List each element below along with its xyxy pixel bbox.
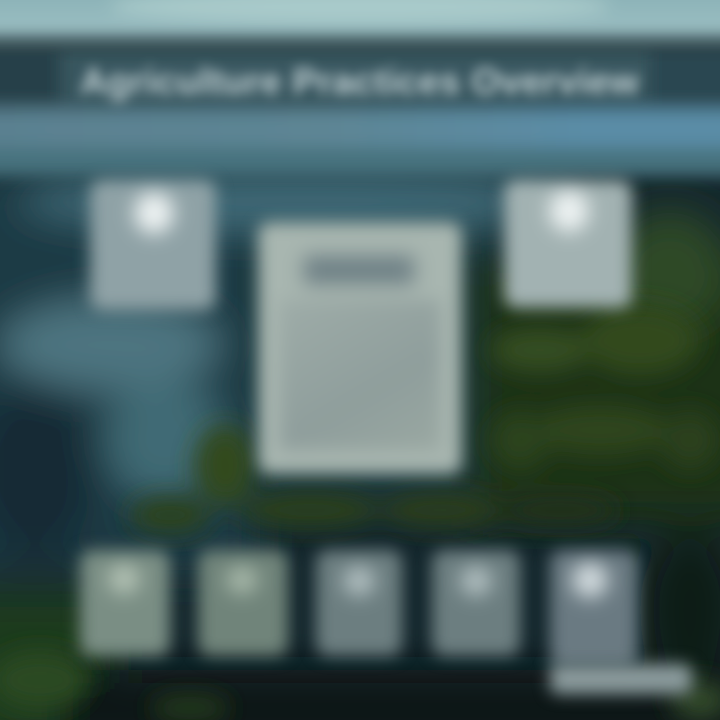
panel: central document [258,222,462,474]
text block: central document [280,300,440,450]
icon: top left [134,192,174,234]
panel: top left card [90,180,216,310]
panel: top right card [504,180,632,308]
icon: bottom card 1 [108,564,140,594]
icon: bottom card 2 [226,566,258,594]
panel: bottom card 1 [80,550,170,656]
icon: bottom card 5 [572,562,608,598]
panel: bottom card 5 [550,550,638,666]
heading: central document [304,256,414,284]
title: Agriculture Practices Overview [80,61,639,102]
panel: bottom card 2 [198,550,288,656]
text block: bottom right caption [550,664,692,694]
icon: bottom card 3 [343,566,375,596]
icon: top right [549,190,589,232]
panel: bottom card 4 [432,550,520,656]
panel: bottom card 3 [316,550,402,656]
icon: bottom card 4 [460,566,492,596]
